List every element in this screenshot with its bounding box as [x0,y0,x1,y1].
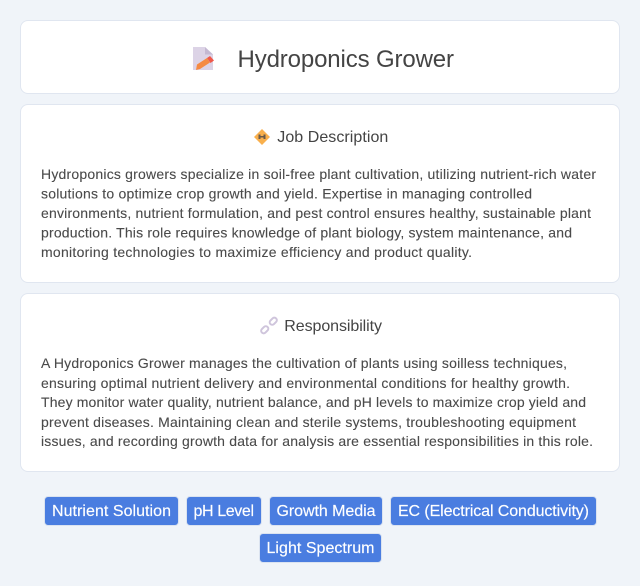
text block: job description: Hydroponics growers specialize in soil-free plant cultivation, utilizing nutrient-rich water [41,166,596,182]
heading: responsibility: Responsibility [284,318,382,335]
tag: Light Spectrum: Light Spectrum [266,540,374,556]
tag: Nutrient Solution: Nutrient Solution [52,502,170,520]
text block: responsibility: They monitor water quality, nutrient balance, and pH levels to maximize crop yield and [41,394,586,410]
panel: title header [20,20,620,94]
tag: EC (Electrical Conductivity): EC (Electrical Conductivity) [398,502,588,520]
text block: job description [41,166,596,260]
tag: pH Level: pH Level [193,502,254,520]
tag: Light Spectrum [258,532,382,562]
icon: chain link [260,317,278,334]
tag: EC (Electrical Conductivity) [390,496,596,526]
tag: Growth Media [268,496,382,526]
heading: job description: Job Description [277,129,388,146]
panel: job description [20,104,620,283]
title: Hydroponics Grower [238,46,454,73]
text block: job description: monitoring technologies to maximize efficiency and product quality. [41,244,472,260]
text block: job description: solutions to optimize crop growth and yield. Expertise in managing controlled [41,186,532,202]
text block: responsibility: A Hydroponics Grower manages the cultivation of plants using soilless techniques, [41,355,567,371]
text block: responsibility: issues, and recording growth data for analysis are essential responsibilities in this role. [41,433,593,449]
text block: responsibility [41,355,593,449]
tag: Nutrient Solution [44,496,178,526]
text block: job description: production. This role requires knowledge of plant biology, system maintenance, and [41,224,572,240]
text block: job description: environments, nutrient formulation, and pest control ensures healthy, sustainable plant [41,205,591,221]
text block: responsibility: ensuring optimal nutrient delivery and environmental conditions for healthy growth. [41,375,570,391]
icon: orange diamond [254,129,270,145]
tag: pH Level [186,496,262,526]
text block: responsibility: prevent diseases. Maintaining clean and sterile systems, troubleshooting equipment [41,414,576,430]
tag: Growth Media: Growth Media [276,502,375,520]
panel: responsibility [20,293,620,472]
icon: document with pencil [193,47,214,70]
